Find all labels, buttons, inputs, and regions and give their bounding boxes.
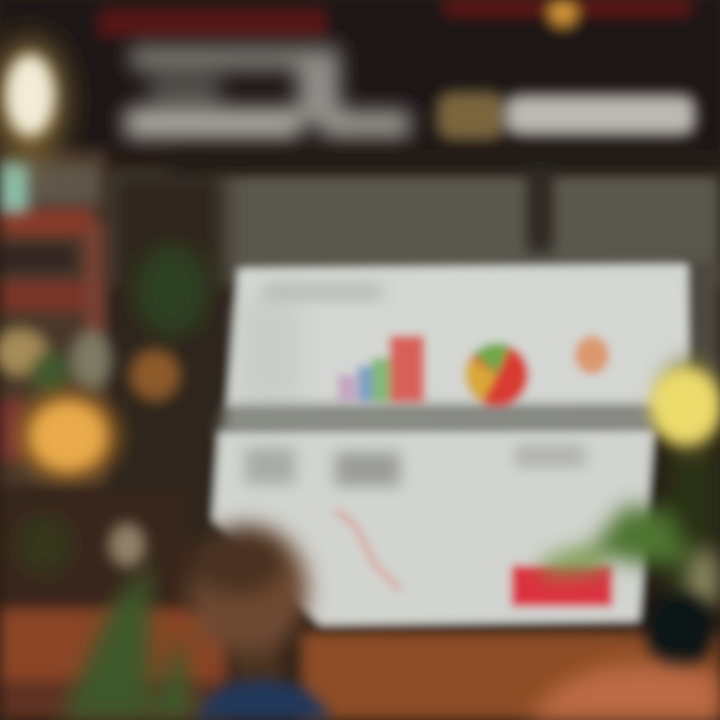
dark head: right [646,594,714,670]
ceiling beam [170,150,720,174]
person head [188,524,308,690]
lamp: white top left [0,42,60,158]
orange shoulder: bottom right [530,664,720,720]
blurred sign lettering right [437,92,695,140]
lamp: orange left [18,392,118,480]
blurred light spot: lower left [109,523,145,567]
person shirt [194,680,330,720]
whiteboard lower panel [212,430,655,626]
pie chart [465,343,528,406]
left shelves [0,150,112,490]
top dark sign band [0,0,720,150]
lamp: yellow right [650,359,720,451]
bar chart [338,336,424,402]
line chart: red trend [335,510,400,590]
whiteboard divider band [218,405,660,436]
plant: bottom-left green leaves [17,515,195,720]
plant: right side foliage [540,450,720,608]
plant: dark green by the post [136,244,208,336]
red callout button [512,566,612,606]
small chart: orange blob [575,336,609,374]
wall post [527,165,553,253]
blurred sign lettering left [125,46,410,138]
whiteboard upper panel [226,264,690,410]
glow: amber behind post [130,349,180,401]
table surface [0,490,720,720]
